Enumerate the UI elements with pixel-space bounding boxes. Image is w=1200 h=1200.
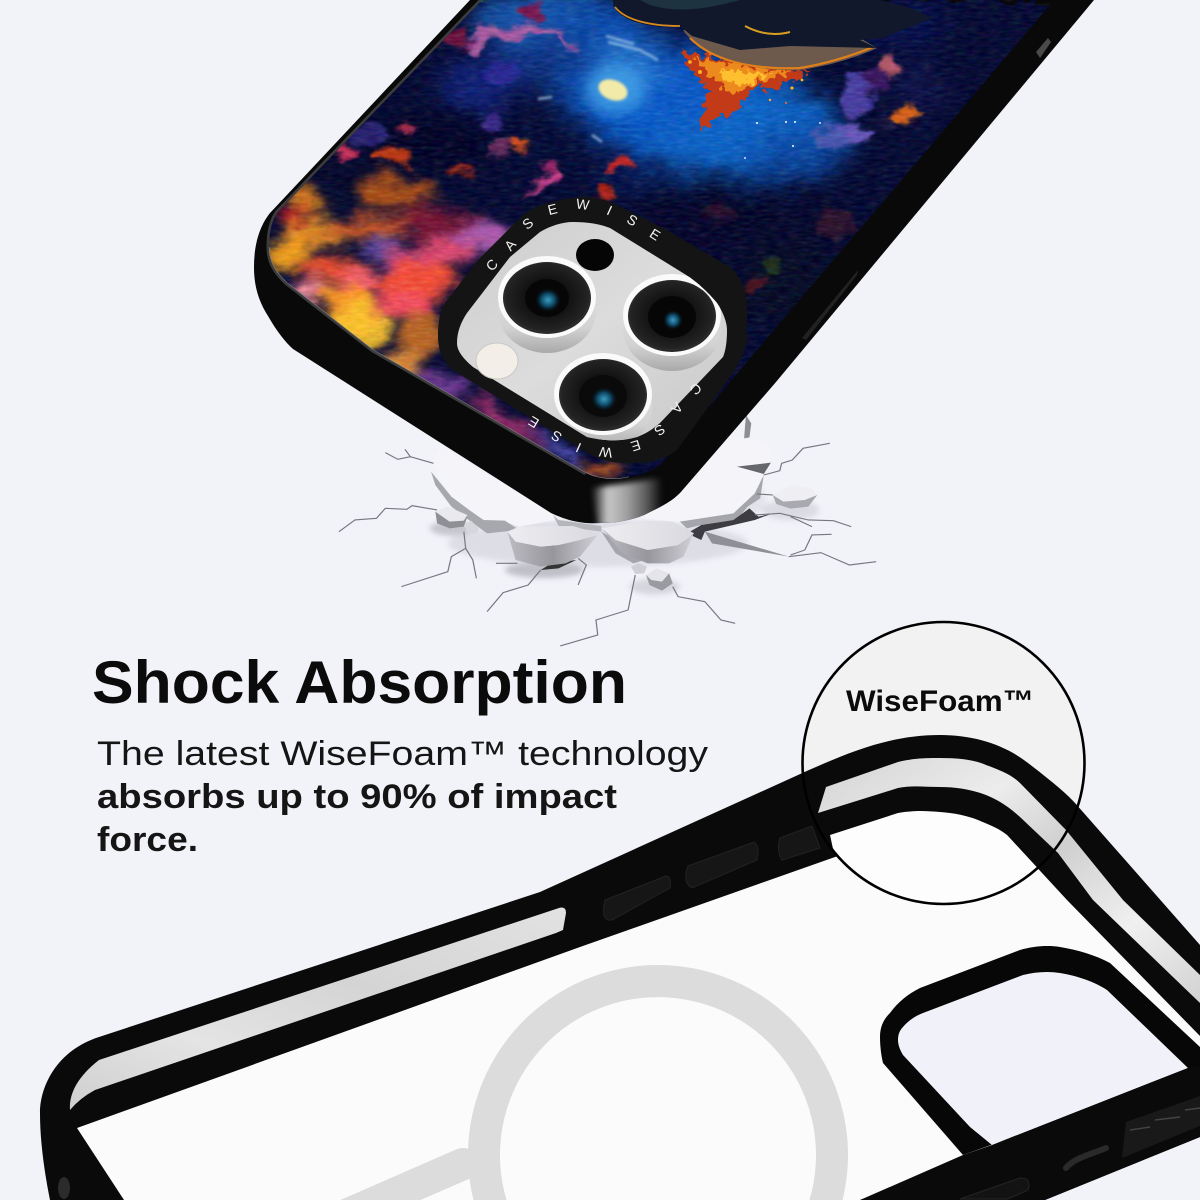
heading: Shock Absorption [92,649,627,716]
ground slabs [431,415,789,570]
camera cutout frame [880,946,1200,1155]
body text [97,735,708,859]
body text: force. [97,821,198,859]
bumper corner highlight [269,0,1051,528]
magnifier outline [802,622,1084,904]
casewise brand text, lower: CASEWISE [528,384,701,458]
clear case with black frame [40,735,1200,1200]
camera hole [576,239,614,271]
casewise brand text, upper: CASEWISE [487,198,661,270]
magnified interior [830,811,1036,867]
phone with painted case [254,0,1094,524]
body text: The latest WiseFoam™ technology [97,735,708,773]
bottom frame details [960,1096,1200,1199]
fringe of sparks under turtle [680,52,810,133]
left strip [70,908,566,1110]
magsafe ring [468,965,848,1200]
sea turtle [613,0,933,133]
cracked ground impact [339,415,876,646]
flash [476,343,518,379]
camera island [438,197,747,463]
left rock fragments [435,507,479,533]
small rocks [631,485,817,591]
moon glow [538,36,658,142]
broken block left [507,526,598,567]
lens two [623,274,721,371]
paint dabs [335,6,917,288]
frame silhouette [40,735,1200,1200]
turtle fringe sparks [688,60,821,159]
magsafe alignment pill [340,1148,479,1200]
magnifier background [802,622,1084,904]
lens three [554,353,652,450]
crack lines [339,443,876,646]
soft shadows [430,480,819,595]
wisefoam magnifier callout [800,622,1090,925]
clear back panel [77,820,1200,1200]
right strip [818,758,1200,1003]
large paint fields [390,0,953,318]
magnifier label: WiseFoam™ [846,685,1034,718]
side buttons [604,826,820,920]
warm lower-left fields [268,177,622,479]
broken block right [602,521,694,563]
bottom frame [860,1065,1200,1200]
corner speaker hole [58,1177,70,1199]
camera cutout opening [898,972,1188,1145]
lens one [498,256,596,353]
body text: absorbs up to 90% of impact [97,778,617,816]
painted artwork [269,0,1050,479]
black bumper [254,0,1094,523]
